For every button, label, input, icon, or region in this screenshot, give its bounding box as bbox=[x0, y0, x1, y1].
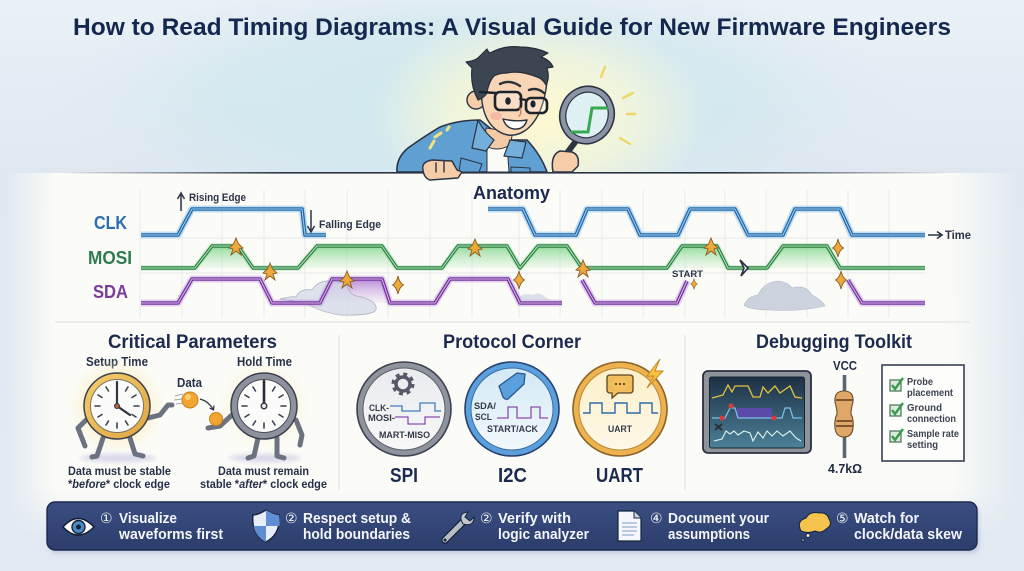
I2C badge: SDA/ bbox=[474, 401, 496, 412]
eyebrows bbox=[500, 82, 544, 93]
takeaway 2: ② bbox=[285, 511, 298, 527]
SPI badge: SPI bbox=[390, 465, 418, 487]
signal labels: MOSI bbox=[88, 248, 132, 268]
magnified waveform bbox=[572, 108, 607, 132]
right hand bbox=[552, 151, 578, 172]
checklist: Sample rate bbox=[907, 428, 959, 440]
eyes bbox=[505, 97, 511, 105]
checklist: setting bbox=[907, 439, 938, 451]
face bbox=[481, 69, 547, 135]
mouth bbox=[503, 119, 527, 129]
magnifier handle bbox=[567, 141, 576, 153]
rising edge callout bbox=[178, 192, 246, 211]
icon: speech bubble bbox=[607, 375, 633, 398]
hold time label: Hold Time bbox=[237, 355, 292, 369]
panel: critical parameters bbox=[68, 332, 327, 491]
neck bbox=[484, 128, 513, 149]
I2C badge: SCL bbox=[475, 412, 492, 423]
hold caption: stable *after* clock edge bbox=[200, 479, 327, 491]
magnifier bbox=[552, 79, 622, 151]
checklist: connection bbox=[907, 413, 956, 425]
illustration: engineer with magnifying glass bbox=[397, 47, 635, 180]
jacket pockets bbox=[459, 158, 530, 172]
hold caption bbox=[200, 466, 327, 491]
waveform fills bbox=[195, 246, 840, 303]
takeaway 5: ⑤ bbox=[836, 511, 849, 527]
panel: protocol corner bbox=[357, 332, 667, 487]
takeaway 2: Respect setup & bbox=[303, 510, 411, 527]
glasses bbox=[480, 92, 526, 100]
SPI badge: MART-MISO bbox=[379, 430, 430, 441]
I2C badge: I2C bbox=[498, 465, 527, 487]
left hand bbox=[423, 160, 462, 180]
takeaway 3: Verify with bbox=[498, 510, 571, 527]
signal labels bbox=[88, 213, 132, 302]
heading: Critical Parameters bbox=[108, 332, 277, 353]
white shirt bbox=[487, 145, 509, 172]
icon: thought cloud bbox=[799, 513, 830, 541]
SPI badge: MOSI- bbox=[368, 413, 395, 424]
hold clock character bbox=[208, 360, 310, 462]
takeaway 4: Document your bbox=[668, 510, 769, 527]
takeaway 2 bbox=[285, 510, 411, 543]
VCC label: VCC bbox=[833, 359, 857, 373]
title: How to Read Timing Diagrams: A Visual Guide for New Firmware Engineers bbox=[73, 14, 951, 41]
cloud: glitch left bbox=[280, 281, 376, 315]
takeaway 5: Watch for bbox=[854, 510, 919, 527]
timing markers bbox=[229, 238, 846, 294]
heading: Debugging Toolkit bbox=[756, 332, 913, 353]
resistance label: 4.7kΩ bbox=[828, 462, 862, 476]
data ball with speed lines bbox=[174, 392, 222, 426]
hold caption: Data must remain bbox=[218, 466, 309, 478]
ear bbox=[467, 91, 485, 109]
setup caption: Data must be stable bbox=[68, 466, 171, 478]
grid lines bbox=[140, 190, 925, 318]
takeaway 4: ④ bbox=[650, 511, 663, 527]
UART badge: UART bbox=[608, 424, 632, 435]
cheeks bbox=[490, 112, 502, 120]
takeaway 3 bbox=[480, 510, 589, 543]
icon: shield bbox=[253, 510, 280, 542]
SPI badge: CLK- bbox=[369, 403, 389, 414]
UART badge bbox=[573, 359, 667, 487]
checklist: Probe bbox=[907, 376, 933, 388]
icon: eye bbox=[63, 518, 94, 535]
takeaway 3: logic analyzer bbox=[498, 526, 589, 543]
direction chevron bbox=[740, 260, 748, 276]
checklist bbox=[882, 365, 964, 461]
icon: gear bbox=[393, 374, 413, 394]
check items bbox=[890, 380, 901, 442]
time axis label: Time bbox=[945, 228, 971, 242]
SDA waveform bbox=[141, 279, 925, 303]
jacket bbox=[397, 120, 547, 172]
heading: Protocol Corner bbox=[443, 332, 582, 353]
rising edge callout: Rising Edge bbox=[189, 192, 246, 204]
cloud: glitch small bbox=[517, 294, 552, 300]
takeaway 3: ② bbox=[480, 511, 493, 527]
collars bbox=[472, 120, 526, 158]
takeaway 1: ① bbox=[100, 511, 113, 527]
signal labels: CLK bbox=[94, 213, 127, 233]
setup time label: Setup Time bbox=[86, 355, 148, 369]
takeaway 1: Visualize bbox=[119, 510, 177, 527]
I2C badge bbox=[465, 362, 559, 487]
takeaway 5: clock/data skew bbox=[854, 526, 962, 543]
takeaway 5 bbox=[836, 510, 962, 543]
checklist: placement bbox=[907, 387, 953, 399]
icon: wrench bbox=[444, 512, 474, 542]
section dividers bbox=[55, 322, 970, 490]
setup clock character bbox=[69, 358, 172, 462]
data label: Data bbox=[177, 376, 203, 390]
nose bbox=[519, 108, 521, 116]
oscilloscope bbox=[703, 371, 811, 453]
setup caption bbox=[68, 466, 171, 491]
cloud: glitch right bbox=[744, 281, 825, 310]
takeaway 4 bbox=[650, 510, 769, 543]
takeaway 1: waveforms first bbox=[118, 526, 223, 543]
UART badge: UART bbox=[596, 465, 643, 487]
icon: document bbox=[618, 511, 641, 541]
resistor bbox=[835, 375, 853, 458]
checklist: Ground bbox=[907, 402, 942, 414]
falling edge callout bbox=[308, 210, 381, 232]
icon: tag bbox=[499, 373, 525, 399]
I2C badge: START/ACK bbox=[487, 424, 538, 435]
SPI badge bbox=[357, 362, 451, 487]
setup caption: *before* clock edge bbox=[68, 479, 170, 491]
light rays bbox=[601, 67, 635, 144]
panel: debugging toolkit bbox=[703, 332, 964, 476]
takeaway 1 bbox=[100, 510, 223, 543]
MOSI waveform bbox=[141, 246, 925, 268]
falling edge callout: Falling Edge bbox=[319, 219, 381, 231]
jacket highlights bbox=[430, 127, 449, 148]
signal labels: SDA bbox=[93, 282, 128, 302]
section heading: anatomy: Anatomy bbox=[473, 183, 550, 203]
takeaway bar bbox=[47, 502, 979, 553]
icon: lightning bbox=[647, 359, 663, 388]
takeaway 2: hold boundaries bbox=[303, 526, 410, 543]
clock signal waveform bbox=[141, 209, 925, 235]
start label: START bbox=[672, 269, 703, 280]
time axis label bbox=[928, 228, 971, 242]
hair bbox=[466, 47, 553, 100]
takeaway 4: assumptions bbox=[668, 526, 750, 543]
